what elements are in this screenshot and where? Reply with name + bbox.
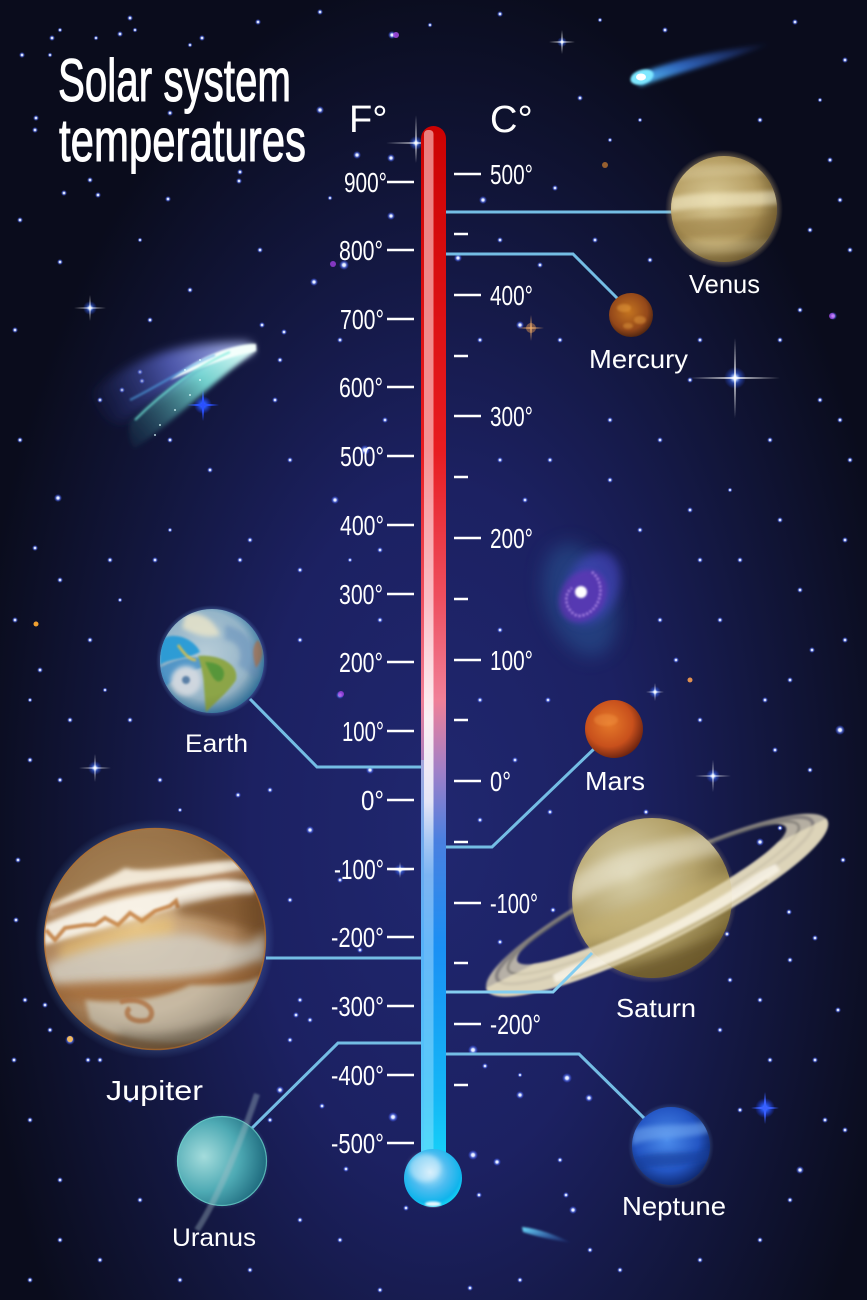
scale heading: Fahrenheit: F°: [349, 99, 387, 141]
Celsius scale: -100°: [490, 888, 538, 919]
Celsius scale: 200°: [490, 523, 533, 554]
label: Venus: Venus: [689, 269, 760, 299]
label: Mercury: Mercury: [589, 344, 688, 374]
Celsius scale: 300°: [490, 401, 533, 432]
scale heading: Celsius: C°: [490, 99, 533, 141]
Celsius scale: 100°: [490, 645, 533, 676]
Fahrenheit scale: 800°: [339, 235, 383, 266]
label: Jupiter: Jupiter: [106, 1075, 203, 1106]
planet: Earth: [156, 605, 268, 717]
label: Saturn: Saturn: [616, 993, 696, 1023]
Fahrenheit scale: 700°: [340, 304, 384, 335]
connector lines: planets to thermometer scale: [250, 212, 672, 1130]
Fahrenheit scale: -200°: [331, 922, 384, 953]
Fahrenheit scale: -500°: [331, 1128, 384, 1159]
bright cross-flare stars: [74, 30, 780, 1124]
Fahrenheit scale: 500°: [340, 441, 384, 472]
planet: Mars: [585, 700, 643, 758]
planet: Neptune: [628, 1103, 714, 1189]
galaxy: [530, 534, 632, 666]
comet: left: [92, 343, 256, 448]
label: Uranus: Uranus: [172, 1224, 256, 1252]
label: Neptune: Neptune: [622, 1191, 726, 1221]
planet: Venus: [665, 150, 783, 268]
thermometer: [404, 126, 462, 1207]
comet: top right: [628, 43, 772, 87]
planet: Uranus: [174, 1094, 270, 1230]
saturn ring: rear layer: [470, 786, 844, 1024]
Fahrenheit scale: 100°: [342, 716, 384, 747]
comet: bottom: [522, 1227, 572, 1243]
Fahrenheit scale: 200°: [339, 647, 383, 678]
Celsius scale: 400°: [490, 280, 533, 311]
Fahrenheit scale: 900°: [344, 167, 387, 198]
thermometer tube: [421, 126, 446, 1166]
Fahrenheit scale: -300°: [331, 991, 384, 1022]
Fahrenheit scale: 400°: [340, 510, 384, 541]
Fahrenheit scale: 300°: [339, 579, 383, 610]
label: Mars: Mars: [585, 766, 645, 796]
Fahrenheit scale: [331, 167, 414, 1159]
Fahrenheit scale: 0°: [361, 785, 384, 816]
title: temperatures: [59, 107, 306, 174]
planet: Saturn with rings: [484, 812, 830, 998]
planet: Jupiter: [35, 819, 275, 1059]
Fahrenheit scale: 600°: [339, 372, 383, 403]
connector line: Saturn: [446, 953, 592, 992]
title: Solar system: [58, 47, 291, 114]
label: Earth: Earth: [185, 730, 248, 758]
saturn ring: front layer: [485, 818, 830, 998]
planet: Mercury: [609, 293, 653, 337]
colored sparkle stars: [34, 32, 835, 1042]
thermometer bulb: [404, 1149, 462, 1207]
Celsius scale: [454, 159, 541, 1085]
title: [58, 47, 306, 174]
Celsius scale: 0°: [490, 766, 511, 797]
Fahrenheit scale: -400°: [331, 1060, 384, 1091]
Celsius scale: 500°: [490, 159, 533, 190]
Fahrenheit scale: -100°: [334, 854, 384, 885]
Celsius scale: -200°: [490, 1009, 541, 1040]
